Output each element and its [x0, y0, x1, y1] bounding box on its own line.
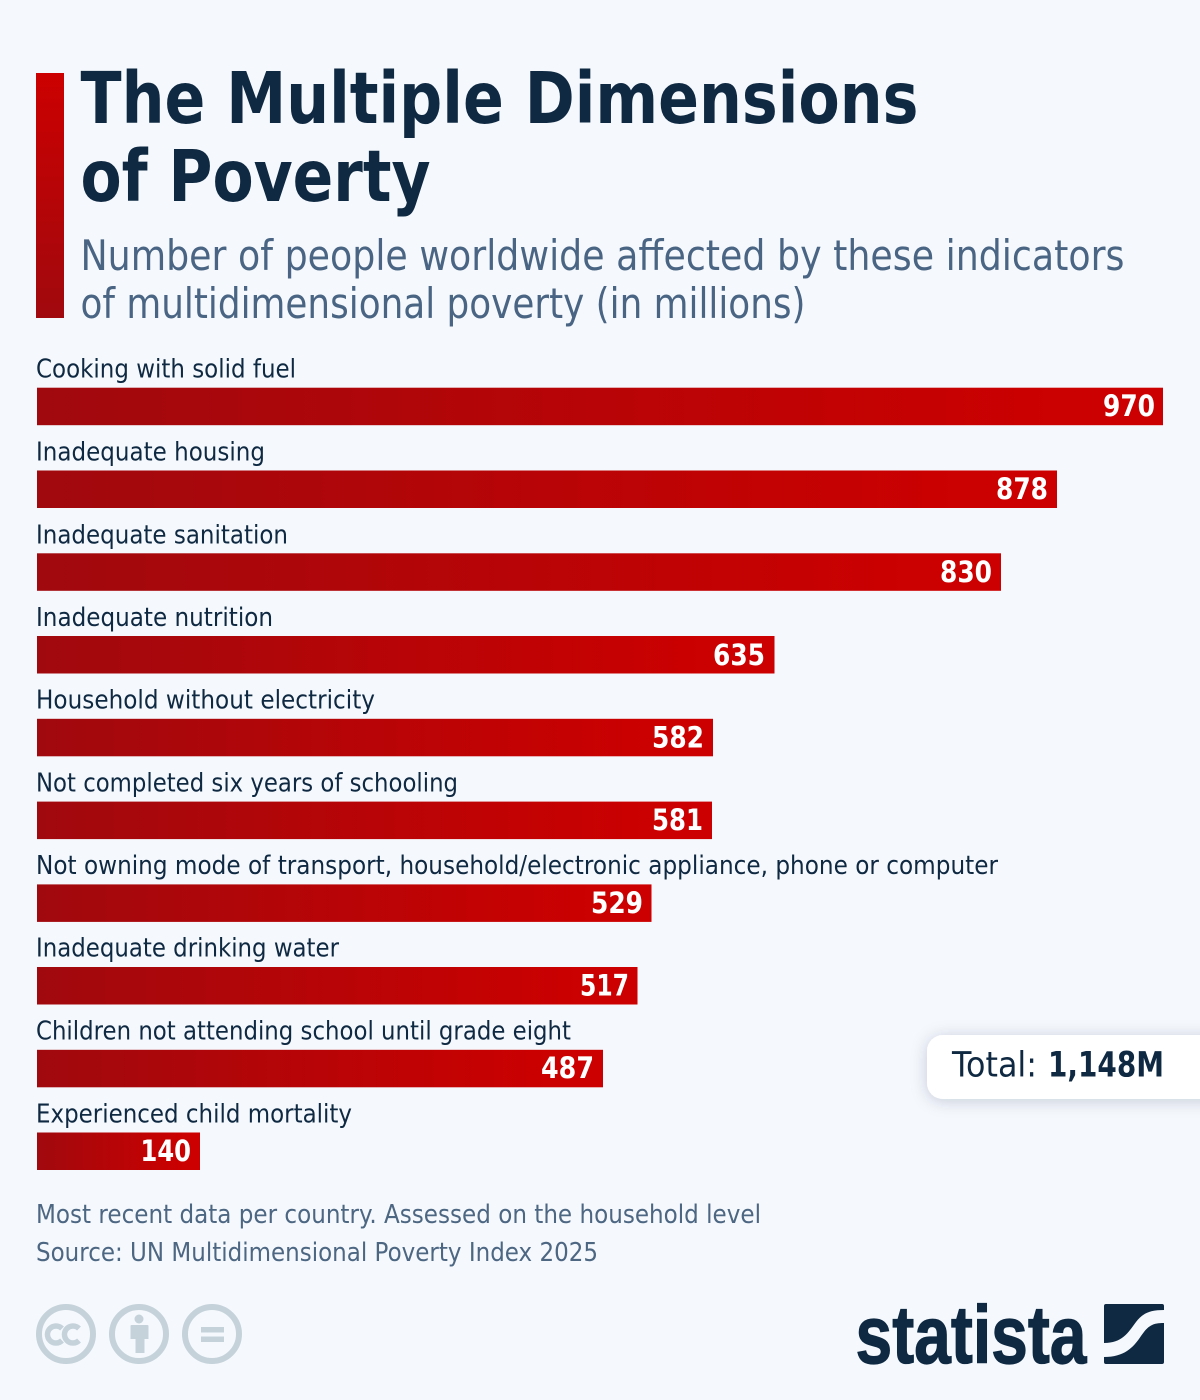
row: Inadequate housing: Inadequate housing [36, 438, 265, 468]
row: Children not attending school until grade eight: 487 [541, 1051, 594, 1085]
title: The Multiple Dimensions [80, 57, 918, 140]
row: Inadequate sanitation [36, 520, 1001, 591]
row: Not completed six years of schooling: Not completed six years of schooling [36, 768, 458, 798]
title: of Poverty [80, 135, 430, 218]
icon: attribution [112, 1307, 166, 1361]
row: Inadequate housing [36, 438, 1057, 508]
row: Inadequate drinking water: Inadequate drinking water [36, 934, 339, 964]
subtitle: of multidimensional poverty (in millions) [80, 279, 806, 328]
row: Not completed six years of schooling: 581 [652, 803, 703, 837]
row: Not owning mode of transport: Not owning mode of transport, household/electronic appliance, phone or computer [36, 851, 998, 881]
row: Cooking with solid fuel: 970 [1103, 389, 1155, 423]
footnote and source: Most recent data per country. Assessed on the household level [36, 1200, 761, 1230]
icon: no derivatives [185, 1307, 239, 1361]
row: Inadequate sanitation: Inadequate sanitation [36, 520, 288, 550]
callout: total: 1,148M [1048, 1046, 1164, 1086]
bar chart [36, 354, 1163, 1170]
statista logo: statista [856, 1290, 1088, 1381]
footnote and source [36, 1200, 761, 1268]
row: Inadequate nutrition [36, 603, 774, 674]
header accent bar [36, 73, 64, 318]
footnote and source: Source: UN Multidimensional Poverty Index 2025 [36, 1238, 598, 1268]
row: Inadequate nutrition: 635 [713, 638, 765, 672]
subtitle [80, 231, 1124, 328]
row: Children not attending school until grade eight: Children not attending school until grade eight [36, 1016, 571, 1046]
row: Not owning mode of transport: 529 [591, 886, 643, 920]
row: Inadequate nutrition: Inadequate nutrition [36, 603, 273, 633]
row: Not owning mode of transport [36, 851, 998, 922]
row: Inadequate drinking water: 517 [580, 968, 629, 1002]
row: Household without electricity: 582 [652, 720, 704, 754]
row: Experienced child mortality: 140 [140, 1134, 191, 1168]
row: Experienced child mortality: Experienced child mortality [36, 1100, 352, 1130]
title [80, 57, 918, 218]
row: Children not attending school until grade eight [36, 1016, 603, 1087]
row: Inadequate housing: 878 [996, 472, 1048, 506]
callout: total [927, 1035, 1200, 1099]
row: Inadequate drinking water [36, 934, 638, 1004]
row: Household without electricity [36, 686, 713, 756]
row: Cooking with solid fuel: Cooking with solid fuel [36, 354, 296, 384]
row: Not completed six years of schooling [36, 768, 712, 839]
icon: creative commons [39, 1307, 93, 1361]
callout: total: Total: [951, 1046, 1037, 1086]
row: Inadequate sanitation: 830 [940, 555, 992, 589]
row: Cooking with solid fuel [36, 354, 1163, 425]
row: Household without electricity: Household without electricity [36, 686, 375, 716]
row: Experienced child mortality [36, 1100, 352, 1170]
